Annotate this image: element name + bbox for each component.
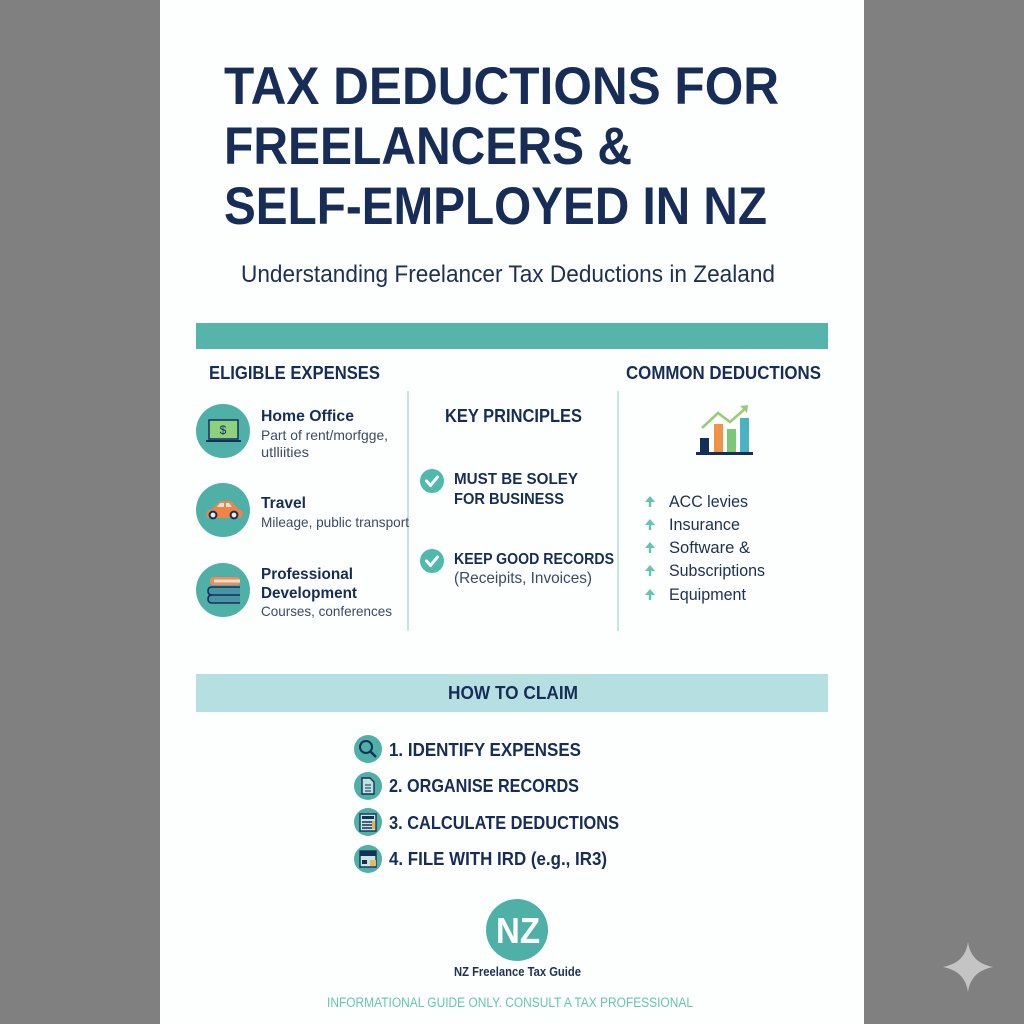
icon: books — [196, 563, 250, 617]
list: deductions: Software & — [669, 539, 750, 557]
title: SELF-EMPLOYED IN NZ — [224, 177, 767, 236]
white page panel — [160, 0, 864, 1024]
icon: magnifier — [354, 735, 382, 763]
step 1: 1. IDENTIFY EXPENSES — [389, 740, 581, 760]
logo: NZ badge: NZ — [496, 910, 540, 951]
list: deductions: Insurance — [669, 516, 740, 534]
heading: eligible expenses: ELIGIBLE EXPENSES — [209, 363, 380, 383]
list: deductions: Subscriptions — [669, 562, 765, 580]
item: professional development: Courses, conferences — [261, 603, 392, 619]
panel: steps — [354, 735, 619, 873]
logo caption: NZ Freelance Tax Guide — [454, 965, 581, 979]
icon: filing form — [354, 845, 382, 873]
principle: records: KEEP GOOD RECORDS — [454, 551, 614, 568]
icon: check one — [420, 469, 444, 493]
icon: car — [196, 483, 250, 537]
icon: laptop with dollar — [196, 404, 250, 458]
principle: records: (Receipits, Invoices) — [454, 570, 592, 587]
list: deductions: ACC levies — [669, 493, 748, 511]
icon: bar chart — [696, 405, 753, 455]
item: home office — [261, 408, 388, 460]
panel: key principles — [420, 406, 614, 587]
icon: document — [354, 772, 382, 800]
column divider left — [407, 391, 409, 631]
step 4: 4. FILE WITH IRD (e.g., IR3) — [389, 849, 607, 869]
title: TAX DEDUCTIONS FOR — [224, 57, 779, 116]
item: travel: Mileage, public transport — [261, 514, 409, 530]
item: home office: Home Office — [261, 408, 354, 425]
list: deductions — [645, 493, 765, 604]
icon: sparkle watermark — [943, 942, 993, 992]
principle: business only — [454, 471, 578, 508]
item: professional development — [261, 566, 392, 619]
item: home office: utlliities — [261, 444, 309, 460]
item: home office: Part of rent/morfgge, — [261, 427, 388, 443]
item: travel — [261, 495, 409, 530]
column divider right — [617, 391, 619, 631]
title — [224, 57, 779, 236]
icon: laptop with dollar: $ — [220, 423, 227, 437]
item: professional development: Professional — [261, 566, 353, 583]
how to claim banner — [196, 674, 828, 712]
list: deductions: Equipment — [669, 586, 746, 604]
step 3: 3. CALCULATE DEDUCTIONS — [389, 813, 619, 833]
logo: NZ badge — [486, 899, 548, 961]
panel: eligible expenses — [196, 404, 409, 619]
disclaimer: INFORMATIONAL GUIDE ONLY. CONSULT A TAX PROFESSIONAL — [327, 995, 693, 1010]
heading: common deductions: COMMON DEDUCTIONS — [626, 363, 821, 383]
teal banner — [196, 323, 828, 349]
heading: key principles: KEY PRINCIPLES — [445, 406, 582, 426]
principle: business only: FOR BUSINESS — [454, 491, 564, 508]
title: FREELANCERS & — [224, 117, 632, 176]
icon: check two — [420, 549, 444, 573]
principle: records — [454, 551, 614, 587]
step 2: 2. ORGANISE RECORDS — [389, 776, 579, 796]
item: travel: Travel — [261, 495, 306, 512]
item: professional development: Development — [261, 585, 358, 602]
how to claim banner: HOW TO CLAIM — [448, 683, 578, 703]
subtitle: Understanding Freelancer Tax Deductions in Zealand — [241, 261, 775, 288]
principle: business only: MUST BE SOLEY — [454, 471, 578, 488]
icon: calculator — [354, 808, 382, 836]
panel: common deductions — [645, 405, 765, 604]
